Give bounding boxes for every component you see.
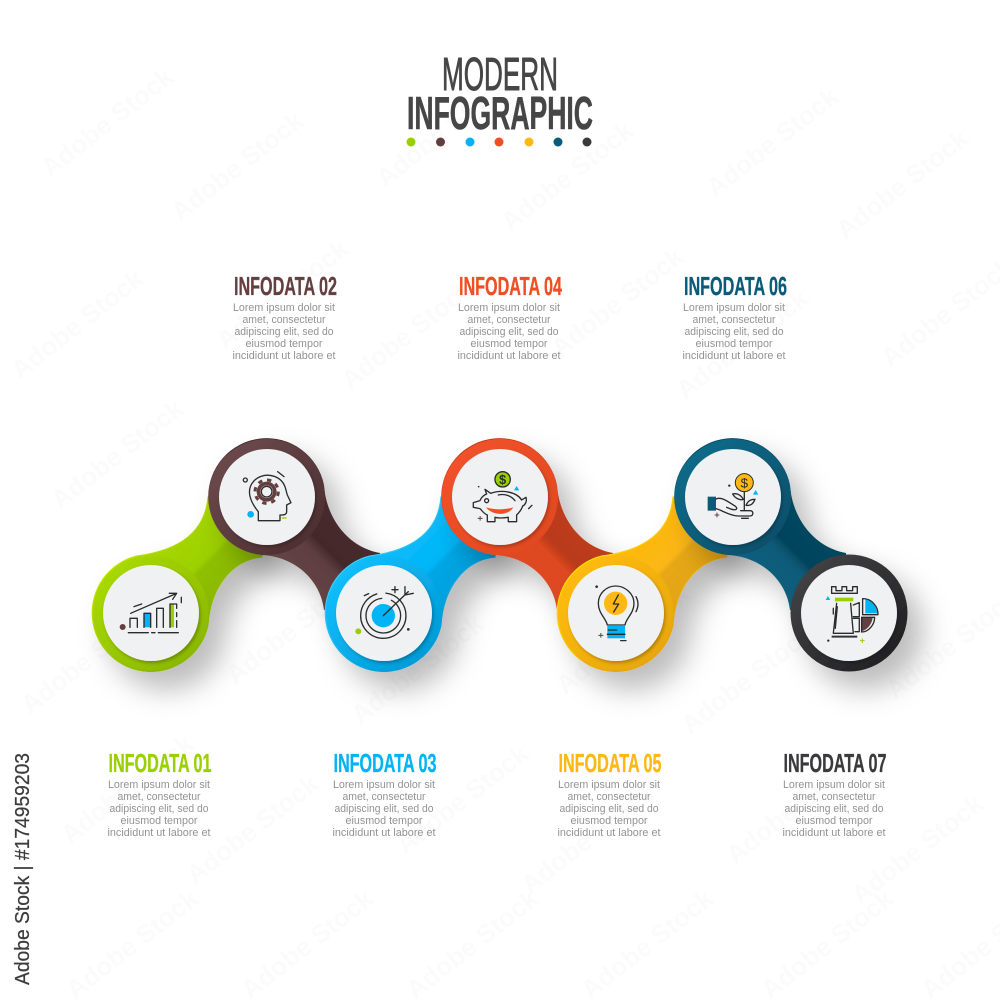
text block: infodata 01: incididunt ut labore et: [108, 827, 210, 839]
segment 3: blue: [325, 497, 500, 671]
infographic canvas: Adobe Stock: [220, 568, 364, 690]
text block: infodata 06: INFODATA 06: [684, 271, 787, 301]
text block: infodata 07: incididunt ut labore et: [782, 827, 886, 839]
text block: infodata 04: eiusmod tempor: [470, 338, 548, 350]
text block: infodata 07: adipiscing elit, sed do: [784, 803, 884, 815]
infographic canvas: Adobe Stock: [495, 115, 639, 237]
infographic canvas: Adobe Stock: [370, 71, 514, 193]
text block: infodata 04: [458, 271, 562, 362]
infographic canvas: Adobe Stock: [5, 263, 149, 385]
text block: infodata 07: Lorem ipsum dolor sit: [783, 779, 885, 791]
infographic canvas: Adobe Stock: [335, 273, 479, 395]
title: INFOGRAPHIC: [407, 87, 593, 139]
segment 5: yellow: [557, 497, 732, 671]
text block: infodata 04: INFODATA 04: [459, 271, 562, 301]
text block: infodata 02: amet, consectetur: [242, 314, 326, 326]
text block: infodata 02: [232, 271, 337, 362]
text block: infodata 04: amet, consectetur: [468, 314, 551, 326]
infographic canvas: Adobe Stock: [845, 788, 989, 910]
text block: infodata 03: INFODATA 03: [334, 748, 436, 778]
white discs: [103, 449, 897, 661]
side stock credit: Adobe Stock | #174959203: [12, 753, 34, 985]
text block: infodata 06: Lorem ipsum dolor sit: [683, 302, 785, 314]
text block: infodata 07: eiusmod tempor: [796, 815, 873, 827]
segment 7: dark: [790, 554, 908, 672]
text block: infodata 02: INFODATA 02: [234, 271, 337, 301]
icon: piggy bank with coin: $: [499, 473, 506, 487]
segment 4: red: [441, 438, 616, 613]
icon: light bulb: [595, 585, 638, 641]
text block: infodata 06: adipiscing elit, sed do: [684, 326, 784, 338]
text block: infodata 03: Lorem ipsum dolor sit: [333, 779, 435, 791]
text block: infodata 06: incididunt ut labore et: [682, 350, 786, 362]
text block: infodata 07: [782, 748, 886, 839]
icon: piggy bank with coin: [473, 472, 532, 522]
text block: infodata 05: [558, 748, 662, 839]
text block: infodata 03: amet, consectetur: [342, 791, 426, 803]
text block: infodata 07: amet, consectetur: [792, 791, 876, 803]
text block: infodata 02: Lorem ipsum dolor sit: [233, 302, 335, 314]
text block: infodata 05: amet, consectetur: [568, 791, 651, 803]
text block: infodata 01: adipiscing elit, sed do: [110, 803, 208, 815]
infographic canvas: Adobe Stock: [700, 81, 844, 203]
text block: infodata 06: [682, 271, 787, 362]
icon: hand with money plant: $: [741, 475, 749, 490]
text block: infodata 07: INFODATA 07: [784, 748, 886, 778]
text block: infodata 02: eiusmod tempor: [246, 338, 323, 350]
text block: infodata 04: adipiscing elit, sed do: [460, 326, 558, 338]
infographic canvas: Adobe Stock: [15, 598, 159, 720]
text block: infodata 03: adipiscing elit, sed do: [334, 803, 434, 815]
text block: infodata 02: adipiscing elit, sed do: [234, 326, 334, 338]
text block: infodata 05: INFODATA 05: [558, 748, 662, 778]
text block: infodata 01: [108, 748, 212, 839]
text block: infodata 02: incididunt ut labore et: [232, 350, 336, 362]
text block: infodata 03: incididunt ut labore et: [332, 827, 436, 839]
infographic canvas: Adobe Stock: [45, 393, 189, 515]
text block: infodata 01: INFODATA 01: [108, 748, 212, 778]
text block: infodata 03: eiusmod tempor: [346, 815, 423, 827]
text block: infodata 03: [332, 748, 436, 839]
icon: target with arrow: [355, 587, 413, 638]
infographic canvas: Adobe Stock: [670, 283, 814, 405]
title colour dots: [406, 138, 592, 146]
text block: infodata 06: eiusmod tempor: [696, 338, 773, 350]
infographic canvas: Adobe Stock: [165, 105, 309, 227]
infographic canvas: Adobe Stock: [55, 728, 199, 850]
infographic canvas: Adobe Stock: [675, 618, 819, 740]
segment 1: green: [92, 497, 267, 671]
text block: infodata 01: eiusmod tempor: [120, 815, 198, 827]
title: [407, 48, 593, 139]
infographic canvas: Adobe Stock: [345, 608, 489, 730]
segment 2: brown: [208, 438, 383, 613]
text block: infodata 05: incididunt ut labore et: [558, 827, 660, 839]
text block: infodata 06: amet, consectetur: [692, 314, 776, 326]
infographic canvas: Adobe Stock: [180, 768, 324, 890]
text block: infodata 05: adipiscing elit, sed do: [560, 803, 658, 815]
infographic canvas: Adobe Stock: [390, 738, 534, 860]
icon: bar chart: [120, 593, 181, 633]
text block: infodata 01: amet, consectetur: [118, 791, 201, 803]
text block: infodata 05: Lorem ipsum dolor sit: [558, 779, 660, 791]
infographic canvas: Adobe Stock: [830, 123, 974, 245]
infographic canvas: Adobe Stock: [545, 241, 689, 363]
title: MODERN: [442, 48, 558, 100]
infographic canvas: Adobe Stock: [35, 61, 179, 183]
text block: infodata 04: incididunt ut labore et: [458, 350, 560, 362]
text block: infodata 05: eiusmod tempor: [570, 815, 648, 827]
text block: infodata 04: Lorem ipsum dolor sit: [458, 302, 560, 314]
infographic canvas: Adobe Stock: [720, 748, 864, 870]
icon: chess rook and pie chart: [826, 587, 878, 643]
infographic canvas: Adobe Stock: [515, 778, 659, 900]
icon: hand with money plant: [708, 474, 758, 518]
segment 6: teal: [674, 438, 849, 613]
text block: infodata 01: Lorem ipsum dolor sit: [108, 779, 210, 791]
infographic canvas: Adobe Stock: [550, 578, 694, 700]
icon: head with gear: [243, 472, 291, 521]
infographic canvas: Adobe Stock: [210, 233, 354, 355]
